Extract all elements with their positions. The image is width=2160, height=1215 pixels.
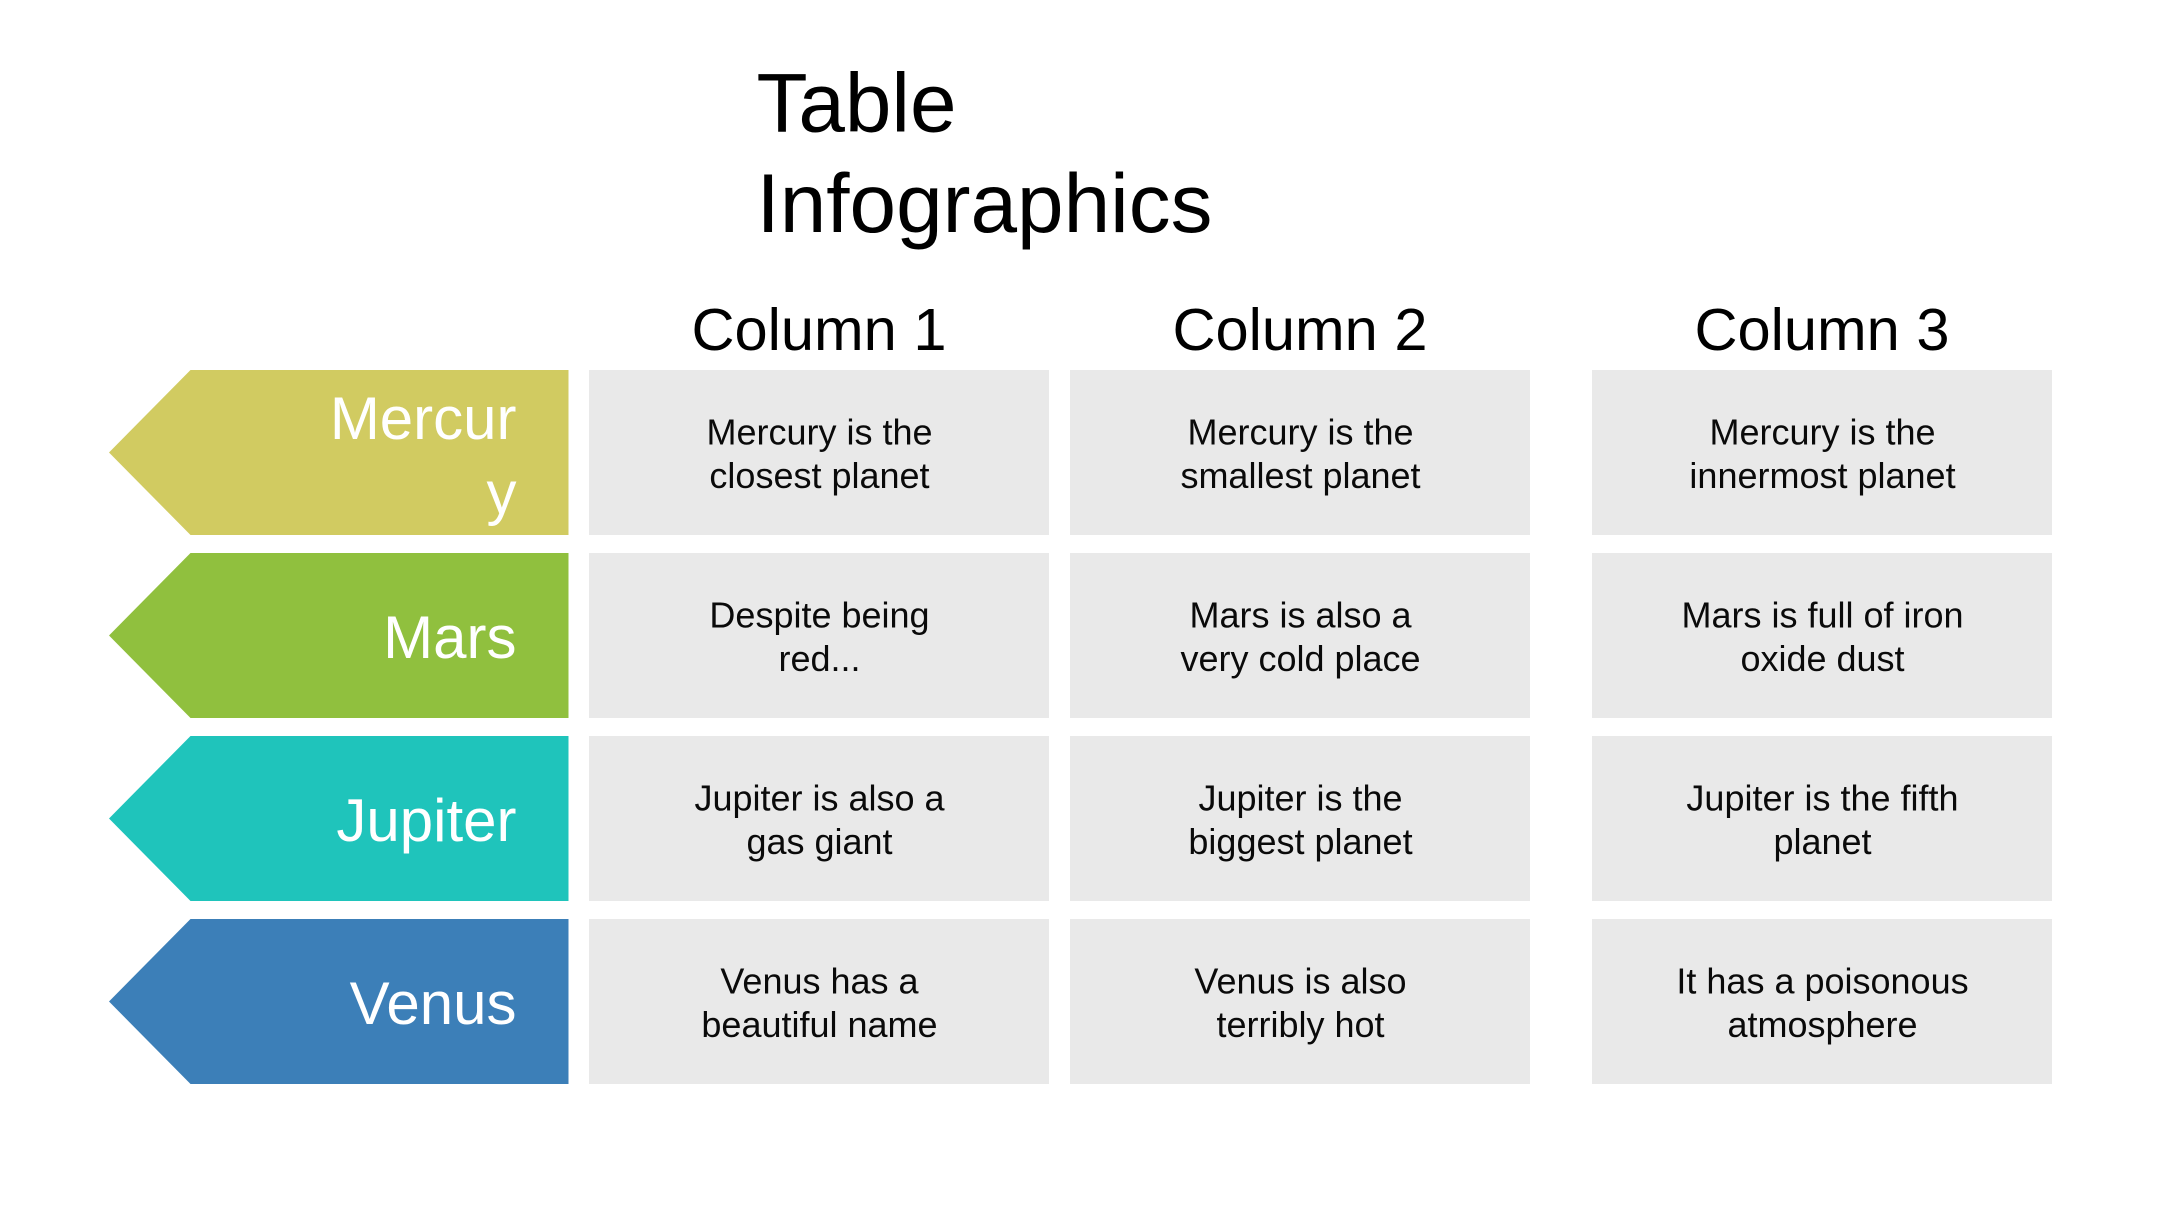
cell: Venus column 2: terribly hot [1216, 1004, 1385, 1045]
cell: Mercury column 2: Mercury is the [1187, 412, 1414, 452]
arrow label: Mercury [109, 370, 568, 535]
cell: Mercury column 3 [1592, 370, 2052, 535]
cell: Jupiter column 3: planet [1773, 821, 1872, 862]
heading: column 2: Column 2 [1172, 296, 1428, 363]
cell: Mercury column 3: Mercury is the [1709, 412, 1936, 452]
heading: column 3: Column 3 [1694, 296, 1950, 363]
cell: Venus column 2 [1070, 919, 1530, 1084]
cell: Venus column 3: atmosphere [1727, 1004, 1918, 1045]
cell: Venus column 1 [589, 919, 1049, 1084]
cell: Mars column 3 [1592, 553, 2052, 718]
cell: Mercury column 1 [589, 370, 1049, 535]
cell: Jupiter column 2 [1070, 736, 1530, 901]
cell: Mercury column 2 [1070, 370, 1530, 535]
cell: Mars column 1: red... [778, 638, 861, 679]
cell: Mars column 1: Despite being [709, 594, 930, 636]
cell: Mercury column 1: closest planet [709, 455, 930, 496]
cell: Venus column 3 [1592, 919, 2052, 1084]
cell: Mars column 3: Mars is full of iron [1681, 594, 1964, 636]
cell: Mars column 2: very cold place [1180, 638, 1421, 679]
arrow label: Mars: Mars [383, 604, 516, 671]
title: Infographics [756, 156, 1212, 250]
cell: Jupiter column 1: gas giant [746, 821, 893, 862]
cell: Jupiter column 2: Jupiter is the [1198, 778, 1403, 818]
cell: Jupiter column 2: biggest planet [1188, 821, 1413, 862]
cell: Mars column 2: Mars is also a [1189, 594, 1413, 636]
cell: Venus column 1: beautiful name [701, 1004, 938, 1045]
arrow label: Venus: Venus [350, 970, 516, 1037]
title: Table [756, 56, 957, 150]
cell: Mars column 3: oxide dust [1740, 638, 1905, 679]
cell: Jupiter column 1: Jupiter is also a [694, 778, 946, 818]
arrow label: Jupiter [109, 736, 568, 901]
cell: Venus column 1: Venus has a [720, 960, 920, 1002]
row: Venus [109, 919, 2052, 1084]
arrow label: Mercury: Mercur [330, 385, 516, 452]
row: Jupiter [109, 736, 2052, 901]
arrow label: Venus [109, 919, 568, 1084]
cell: Mars column 1 [589, 553, 1049, 718]
row: Mercury [109, 370, 2052, 535]
cell: Venus column 3: It has a poisonous [1676, 960, 1969, 1002]
cell: Mars column 2 [1070, 553, 1530, 718]
cell: Mercury column 2: smallest planet [1180, 455, 1421, 496]
cell: Venus column 2: Venus is also [1194, 960, 1407, 1002]
arrow label: Mercury: y [486, 460, 516, 526]
row: Mars [109, 553, 2052, 718]
cell: Mercury column 3: innermost planet [1689, 455, 1956, 496]
cell: Jupiter column 1 [589, 736, 1049, 901]
arrow label: Mars [109, 553, 568, 718]
cell: Mercury column 1: Mercury is the [706, 412, 933, 452]
heading: column 1: Column 1 [691, 296, 947, 363]
cell: Jupiter column 3: Jupiter is the fifth [1686, 778, 1959, 818]
cell: Jupiter column 3 [1592, 736, 2052, 901]
arrow label: Jupiter: Jupiter [336, 787, 516, 854]
column headers [691, 296, 1950, 363]
title [756, 56, 1212, 250]
